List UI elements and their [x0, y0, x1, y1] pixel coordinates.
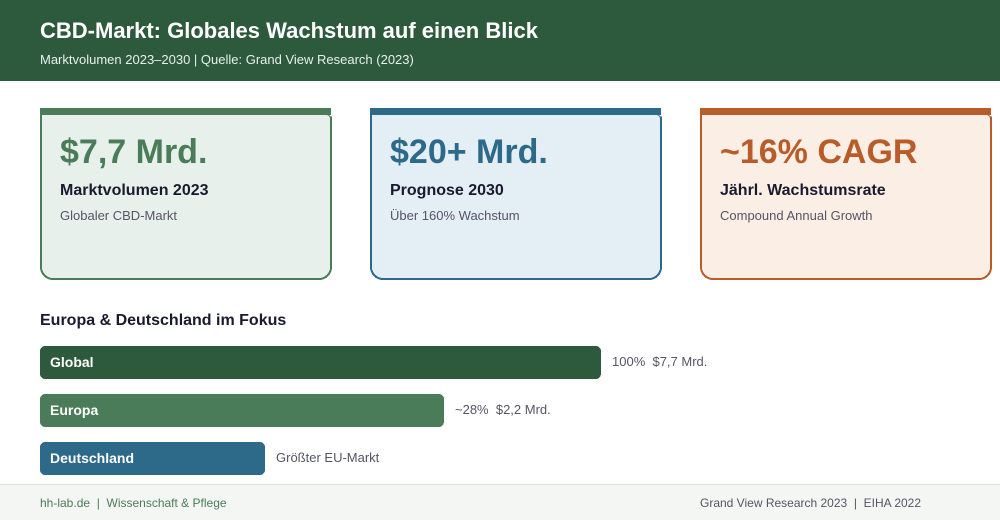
bar: Europa: Europa [50, 402, 98, 418]
bar: Deutschland [40, 442, 380, 475]
bar: Deutschland: Deutschland [50, 450, 134, 466]
value: $20+ Mrd. [390, 133, 548, 171]
panel: Wachstumsrate [700, 108, 992, 280]
header banner [0, 0, 1000, 81]
label: Prognose 2030 [390, 182, 504, 199]
title: CBD-Markt: Globales Wachstum auf einen Blick [40, 18, 538, 43]
subtitle: Marktvolumen 2023–2030 | Quelle: Grand View Research (2023) [40, 52, 414, 67]
panel: Marktvolumen 2023 [40, 108, 332, 280]
footer left text: hh-lab.de | Wissenschaft & Pflege [40, 496, 227, 510]
bar chart [40, 346, 707, 475]
footer [0, 484, 1000, 520]
panel: Prognose 2030 [370, 108, 662, 280]
note: Über 160% Wachstum [390, 208, 520, 223]
note: Globaler CBD-Markt [60, 208, 177, 223]
bar: Europa [40, 394, 551, 427]
value: $7,7 Mrd. [60, 133, 207, 171]
value: ~16% CAGR [720, 133, 917, 171]
bar: Europa: ~28% $2,2 Mrd. [455, 402, 551, 417]
bar: Deutschland: Größter EU-Markt [276, 450, 379, 465]
bar: Global: Global [50, 354, 94, 370]
bar: Global: 100% $7,7 Mrd. [612, 354, 707, 369]
section heading: Europa & Deutschland im Fokus [40, 312, 286, 329]
bar: Global [40, 346, 707, 379]
label: Jährl. Wachstumsrate [720, 182, 886, 199]
note: Compound Annual Growth [720, 208, 872, 223]
footer sources: Grand View Research 2023 | EIHA 2022 [700, 496, 921, 510]
label: Marktvolumen 2023 [60, 182, 209, 199]
